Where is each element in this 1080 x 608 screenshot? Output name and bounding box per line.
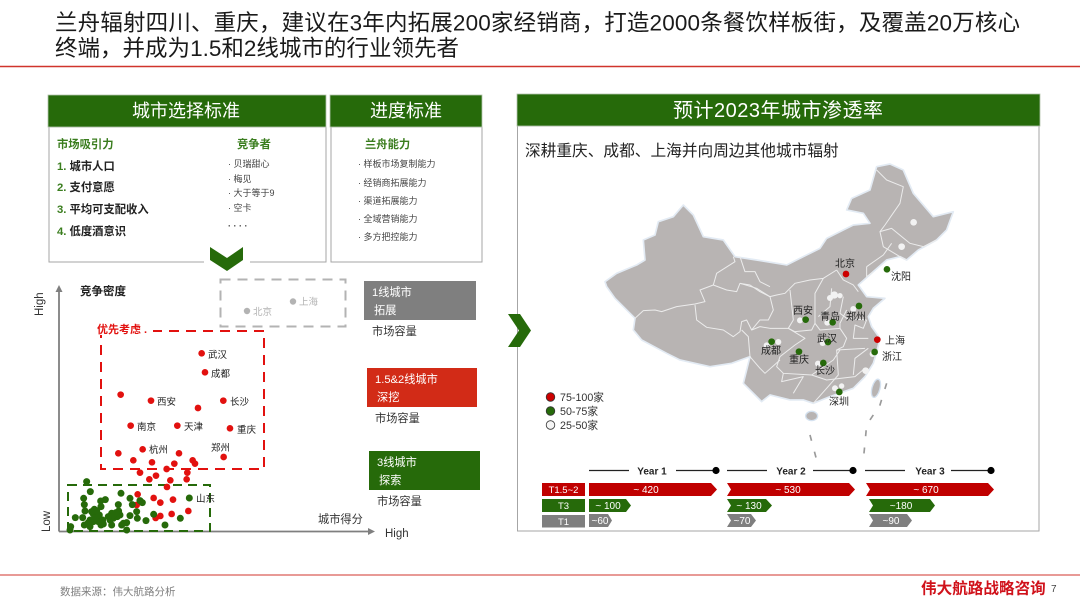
text block: competitors: · · · · — [228, 221, 248, 231]
timeline: T3 volume arrows: ~ 100 — [595, 501, 621, 512]
timeline: tier row labels — [542, 483, 585, 528]
legend block: red tier 1.5 and 2 — [367, 368, 477, 425]
map city labels: 郑州 — [846, 310, 866, 323]
red city dots — [843, 271, 881, 343]
box: priority cities: 优先考虑 . — [97, 322, 147, 336]
panel: 2023 city penetration — [517, 94, 1040, 531]
timeline: T1 volume arrows: ~60 — [592, 516, 609, 527]
city labels: 郑州 — [211, 442, 230, 454]
timeline: T1.5~2 volume arrows: ~ 530 — [775, 485, 801, 496]
timeline: T1.5~2 volume arrows — [589, 483, 994, 496]
heading: 2023 city penetration: 预计2023年城市渗透率 — [673, 99, 883, 122]
timeline: year headers: Year 2 — [776, 466, 806, 478]
text block: competitors: · 贝瑞甜心 — [228, 158, 270, 169]
map city labels: 长沙 — [815, 365, 835, 377]
text block: Lanzhou capabilities: · 经销商拓展能力 — [358, 177, 426, 188]
text block: market attractiveness: 4. 低度酒意识 — [57, 224, 126, 238]
legend block: grey tier 1: 拓展 — [374, 303, 396, 317]
legend block: red tier 1.5 and 2: 1.5&2线城市 — [375, 372, 438, 386]
legend block: green tier 3 — [369, 451, 480, 508]
text block: market attractiveness: 3. 平均可支配收入 — [57, 202, 149, 216]
text block: Lanzhou capabilities — [358, 137, 436, 242]
map city labels: 浙江 — [882, 351, 902, 363]
axis labels: 城市得分 — [318, 512, 363, 526]
map landmass — [605, 164, 953, 403]
arrow: chevron between panels — [508, 314, 531, 347]
box: tier 3 cluster — [68, 485, 210, 531]
map legend: 75-100家 — [560, 391, 604, 404]
city labels: 杭州 — [149, 444, 168, 456]
map city labels — [761, 257, 911, 408]
title: 兰舟辐射四川、重庆，建议在3年内拓展200家经销商，打造2000条餐饮样板街，及覆盖20万核心 — [55, 10, 1020, 36]
green dots — [66, 478, 193, 533]
map city labels: 沈阳 — [891, 270, 911, 283]
axis labels: High — [385, 528, 409, 540]
map city labels: 重庆 — [789, 353, 809, 366]
legend block: red tier 1.5 and 2: 市场容量 — [375, 411, 420, 425]
timeline: tier row labels: T1.5~2 — [549, 485, 578, 496]
heading: progress criteria: 进度标准 — [370, 101, 442, 121]
city labels: 南京 — [137, 421, 156, 433]
timeline: T1 volume arrows: ~90 — [883, 516, 900, 527]
city labels — [137, 349, 257, 505]
red dots — [115, 350, 233, 521]
box: priority cities — [95, 322, 264, 469]
panel: progress criteria — [330, 95, 482, 262]
timeline: year headers — [589, 466, 995, 478]
timeline: T1 volume arrows — [589, 514, 912, 527]
timeline: tier row labels: T3 — [558, 501, 569, 512]
footer brand: 伟大航路战略咨询 — [921, 578, 1046, 598]
heading: city selection criteria: 城市选择标准 — [132, 101, 240, 121]
page number: 7 — [1051, 584, 1057, 595]
legend block: grey tier 1: 1线城市 — [372, 285, 412, 299]
city labels: 重庆 — [237, 424, 257, 436]
axis labels: Low — [41, 510, 53, 532]
map city labels: 武汉 — [817, 332, 837, 345]
text block: market attractiveness: 1. 城市人口 — [57, 159, 115, 173]
dashed sea border — [810, 383, 887, 460]
legend block: red tier 1.5 and 2: 深挖 — [377, 390, 399, 404]
title: 终端，并成为1.5和2线城市的行业领先者 — [55, 36, 459, 61]
text block: Lanzhou capabilities: · 全域营销能力 — [358, 213, 418, 224]
legend block: grey tier 1: 市场容量 — [372, 324, 417, 338]
text block: competitors — [228, 137, 275, 231]
legend block: green tier 3: 探索 — [379, 473, 401, 487]
timeline: year headers: Year 1 — [637, 466, 667, 478]
map legend: 25-50家 — [560, 419, 598, 432]
legend block: green tier 3: 3线城市 — [377, 455, 417, 469]
text block: market attractiveness: 市场吸引力 — [57, 137, 114, 151]
map city labels: 成都 — [761, 345, 781, 357]
text block: competitors: 竞争者 — [237, 137, 271, 151]
timeline: year headers: Year 3 — [915, 466, 945, 478]
islands — [806, 378, 882, 421]
timeline: tier row labels: T1 — [558, 517, 569, 528]
text block: Lanzhou capabilities: 兰舟能力 — [365, 137, 410, 151]
axis labels: High — [34, 292, 46, 316]
text block: Lanzhou capabilities: · 样板市场复制能力 — [358, 158, 436, 169]
title — [55, 10, 1020, 61]
city labels: 天津 — [184, 422, 204, 433]
city labels: 山东 — [196, 493, 215, 505]
province borders — [635, 170, 937, 403]
timeline: T3 volume arrows — [589, 499, 935, 512]
box: grey tier 1 cluster: 北京 — [253, 306, 272, 318]
heading: city selection criteria — [48, 95, 326, 127]
timeline: T1.5~2 volume arrows: ~ 420 — [633, 485, 659, 496]
map city labels: 北京 — [835, 257, 855, 270]
axes — [56, 285, 375, 535]
text block: competitors: · 大于等于9 — [228, 187, 275, 198]
legend block: green tier 3: 市场容量 — [377, 494, 422, 508]
city labels: 成都 — [211, 368, 231, 380]
heading: 2023 city penetration — [517, 94, 1040, 126]
chart: city score vs competition density scatter — [34, 280, 409, 540]
subtitle: 深耕重庆、成都、上海并向周边其他城市辐射 — [525, 142, 839, 160]
map legend: 50-75家 — [560, 405, 598, 418]
text block: competitors: · 梅见 — [228, 173, 252, 184]
text block: market attractiveness — [57, 137, 149, 238]
timeline: T1 volume arrows: ~70 — [734, 516, 751, 527]
white city dots — [764, 219, 917, 391]
icon: down chevron — [204, 247, 250, 271]
map city labels: 深圳 — [829, 396, 849, 408]
city labels: 西安 — [157, 396, 176, 408]
map of China — [605, 164, 953, 460]
timeline: T3 volume arrows: ~180 — [890, 501, 913, 512]
green city dots — [768, 266, 890, 395]
timeline: T1.5~2 volume arrows: ~ 670 — [913, 485, 939, 496]
text block: competitors: · 空卡 — [228, 202, 252, 213]
text block: Lanzhou capabilities: · 多方把控能力 — [358, 231, 418, 242]
footer source: 数据来源：伟大航路分析 — [60, 585, 176, 598]
legend block: grey tier 1 — [364, 281, 476, 338]
text block: market attractiveness: 2. 支付意愿 — [57, 180, 115, 194]
city labels: 长沙 — [230, 396, 250, 408]
box: grey tier 1 cluster: 上海 — [299, 296, 319, 308]
panel: city selection criteria — [48, 95, 326, 262]
timeline: T3 volume arrows: ~ 130 — [736, 501, 762, 512]
map legend — [546, 391, 604, 432]
axis labels — [34, 284, 409, 540]
heading: progress criteria — [330, 95, 482, 127]
box: grey tier 1 cluster — [220, 280, 346, 326]
map city labels: 上海 — [885, 334, 905, 347]
map city labels: 西安 — [793, 304, 813, 317]
axis labels: 竞争密度 — [80, 284, 126, 298]
text block: Lanzhou capabilities: · 渠道拓展能力 — [358, 195, 418, 206]
city labels: 武汉 — [208, 349, 228, 361]
map city labels: 青岛 — [820, 310, 840, 323]
